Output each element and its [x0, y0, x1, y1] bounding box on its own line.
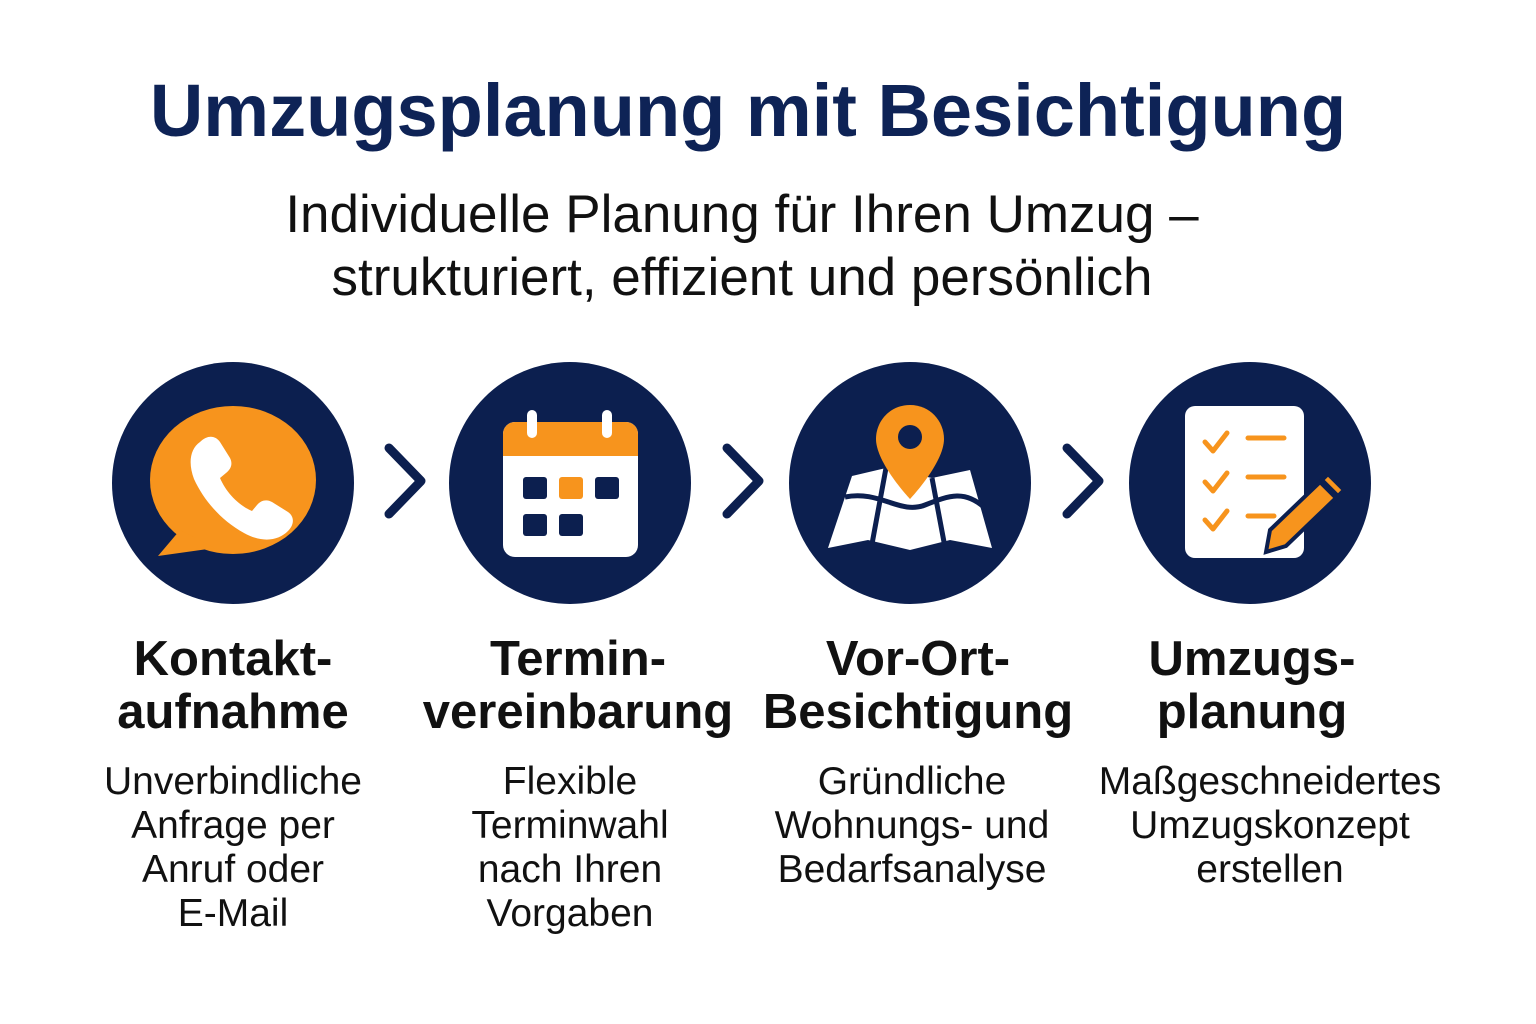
- step 3 description: [774, 760, 1049, 891]
- step 1 description: Anruf oder: [142, 848, 324, 891]
- step 3 description: Bedarfsanalyse: [778, 848, 1046, 891]
- step 4 heading: Umzugs-: [1149, 632, 1355, 686]
- icon: checklist: [1129, 362, 1371, 604]
- step 1 heading: aufnahme: [117, 685, 349, 739]
- step 4 description: [1099, 760, 1441, 891]
- step 2 description: Flexible: [503, 760, 637, 803]
- step 4 heading: planung: [1157, 685, 1347, 739]
- step 1 heading: Kontakt-: [134, 632, 332, 686]
- step 2 description: nach Ihren: [478, 848, 662, 891]
- step 2 heading: [423, 632, 733, 739]
- step 1 description: [104, 760, 362, 935]
- arrow: [389, 448, 421, 514]
- step 1 description: Anfrage per: [131, 804, 335, 847]
- step 3 description: Gründliche: [818, 760, 1006, 803]
- step 2 description: Vorgaben: [486, 892, 654, 935]
- icon: calendar: [449, 362, 691, 604]
- step 1 description: E-Mail: [178, 892, 288, 935]
- subtitle: Individuelle Planung für Ihren Umzug –: [285, 185, 1199, 244]
- step 2 heading: vereinbarung: [423, 685, 733, 739]
- step 2 heading: Termin-: [490, 632, 666, 686]
- step 4 description: erstellen: [1196, 848, 1344, 891]
- step 3 heading: Vor-Ort-: [826, 632, 1010, 686]
- step 1 description: Unverbindliche: [104, 760, 362, 803]
- title: Umzugsplanung mit Besichtigung: [150, 69, 1346, 152]
- icon: phone bubble: [112, 362, 354, 604]
- step 4 description: Umzugskonzept: [1130, 804, 1410, 847]
- icon: map pin: [789, 362, 1031, 604]
- step 2 description: Terminwahl: [471, 804, 669, 847]
- step 3 heading: [763, 632, 1073, 739]
- step 2 description: [471, 760, 669, 935]
- step 1 heading: [117, 632, 349, 739]
- arrow: [727, 448, 759, 514]
- step 3 description: Wohnungs- und: [775, 804, 1049, 847]
- arrow: [1067, 448, 1099, 514]
- process icons: [112, 362, 1371, 604]
- step 4 description: Maßgeschneidertes: [1099, 760, 1441, 803]
- step 4 heading: [1149, 632, 1355, 739]
- subtitle: [285, 185, 1199, 307]
- subtitle: strukturiert, effizient und persönlich: [332, 248, 1152, 307]
- step 3 heading: Besichtigung: [763, 685, 1073, 739]
